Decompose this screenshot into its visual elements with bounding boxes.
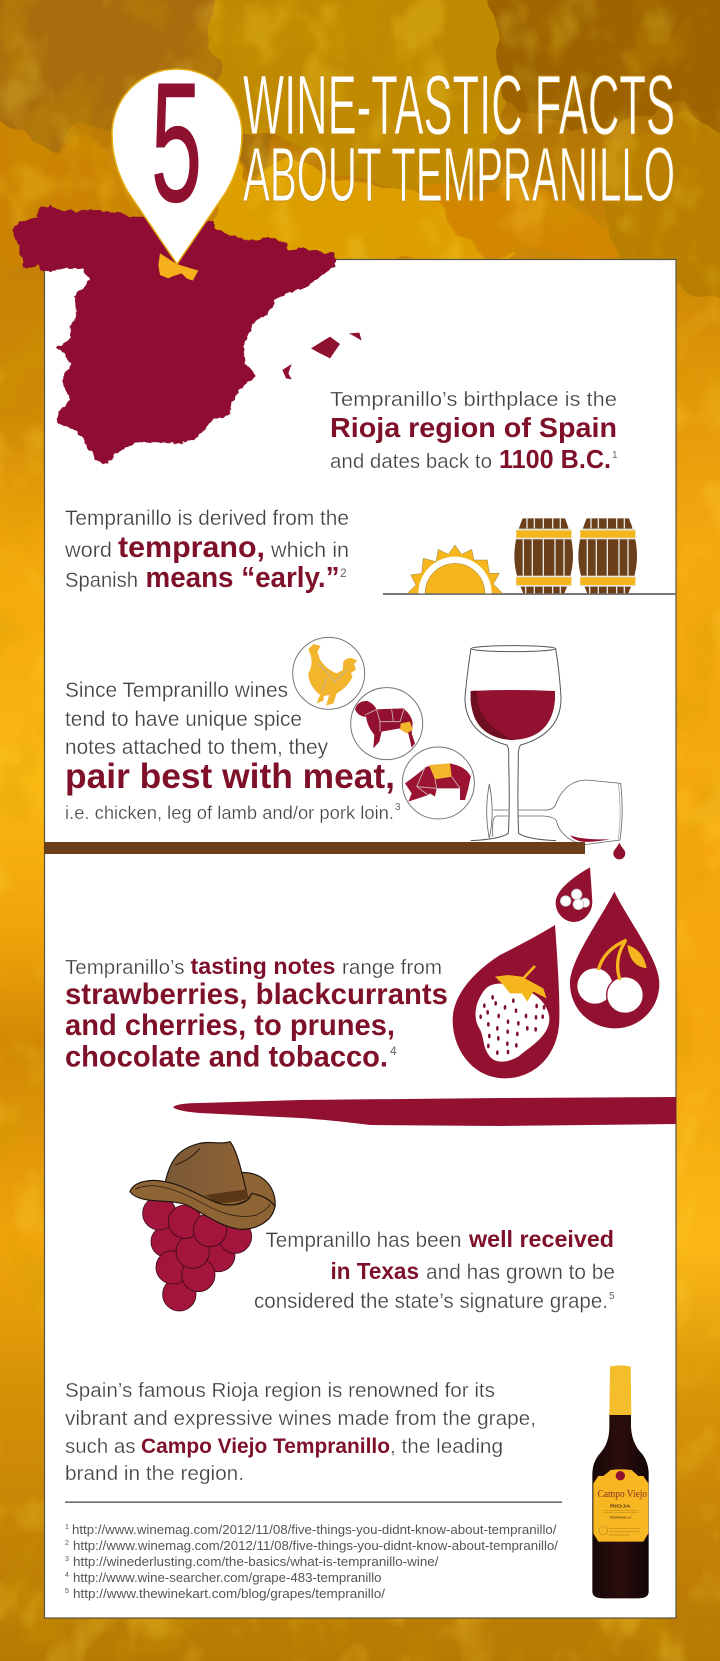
icon: chicken in circle xyxy=(293,637,365,709)
fact 2: temprano: word xyxy=(64,539,112,562)
fact 1: birthplace xyxy=(330,388,618,474)
fact 2: temprano: which in xyxy=(270,539,349,562)
fact 4: tasting notes text: 4 xyxy=(390,1044,397,1058)
footnotes: http://www.winemag.com/2012/11/08/five-things-you-didnt-know-about-tempranillo/ xyxy=(72,1523,557,1537)
fact 4: tasting notes text: chocolate and tobacco. xyxy=(65,1040,388,1074)
panel: white content card xyxy=(44,260,676,1618)
icon: cherry drop xyxy=(570,892,659,1028)
fact 5: Texas text: 5 xyxy=(609,1291,615,1302)
icon: blackcurrant drop xyxy=(556,867,592,922)
fact 1: birthplace: 1 xyxy=(612,450,618,461)
fact 3: pairing text: i.e. chicken, leg of lamb and/or pork loin. xyxy=(65,803,394,823)
fact 4: tasting notes text: strawberries, blackcurrants xyxy=(65,978,448,1011)
fact 3: pairing text: notes attached to them, they xyxy=(65,736,328,759)
icon: barrel 1 xyxy=(514,518,573,593)
icon: barrel 2 xyxy=(578,518,637,593)
fact 5: Texas text: considered the state’s signature grape. xyxy=(254,1290,608,1313)
fact 4: tasting notes text: range from xyxy=(342,956,442,979)
footnotes: 3 xyxy=(65,1556,69,1563)
fact 4: tasting notes text: Tempranillo’s xyxy=(65,956,184,979)
icon: pig in circle xyxy=(402,747,474,819)
footnotes: http://winederlusting.com/the-basics/what-is-tempranillo-wine/ xyxy=(73,1555,439,1569)
icon: lamb in circle xyxy=(351,688,423,760)
fact 6: Campo Viejo text: brand in the region. xyxy=(65,1462,244,1485)
fact 3: pairing text: pair best with meat, xyxy=(65,757,395,796)
fact 2: temprano: Tempranillo is derived from the xyxy=(65,507,349,530)
fact 6: Campo Viejo text: Spain’s famous Rioja region is renowned for its xyxy=(65,1379,495,1402)
fact 6: Campo Viejo text: vibrant and expressive wines made from the grape, xyxy=(65,1407,536,1430)
footnotes: 2 xyxy=(65,1540,69,1547)
fact 5: Texas text: Tempranillo has been xyxy=(266,1229,462,1252)
shelf bar xyxy=(44,842,585,854)
fact 2: temprano: means “early.” xyxy=(146,562,340,594)
fact 3: pairing text: tend to have unique spice xyxy=(65,708,302,731)
fact 3: pairing text: Since Tempranillo wines xyxy=(65,679,288,702)
fact 1: birthplace: and dates back to xyxy=(330,450,492,473)
fact 2: temprano: temprano, xyxy=(118,531,265,564)
icon: Campo Viejo bottle xyxy=(592,1365,649,1598)
icon: rising sun xyxy=(407,545,503,593)
icon: strawberry drop xyxy=(453,925,559,1078)
fact 1: birthplace: Tempranillo’s birthplace is the xyxy=(330,388,617,411)
fact 6: Campo Viejo text: , the leading xyxy=(390,1435,503,1458)
map pin with number 5: 5 xyxy=(151,48,202,238)
map of Spain with Rioja highlighted xyxy=(12,205,362,464)
fact 5: Texas text xyxy=(254,1226,615,1313)
icon: standing wine glass xyxy=(465,646,561,841)
fact 1: birthplace: Rioja region of Spain xyxy=(330,412,617,443)
footnotes: 1 xyxy=(65,1524,69,1531)
fact 5: Texas text: and has grown to be xyxy=(426,1261,615,1284)
footnotes: 5 xyxy=(65,1588,69,1595)
wine smear divider xyxy=(173,1097,676,1126)
ground line under sun and barrels xyxy=(383,593,676,595)
fact 6: Campo Viejo text: Campo Viejo Tempranillo xyxy=(141,1434,390,1458)
footnote rule xyxy=(65,1502,562,1503)
fact 2: temprano: Spanish xyxy=(65,569,138,592)
footnotes xyxy=(65,1523,559,1601)
fact 3: pairing text xyxy=(65,679,401,823)
title xyxy=(243,58,675,218)
icon: Campo Viejo bottle: TEMPRANILLO xyxy=(609,1516,632,1520)
fact 5: Texas text: in Texas xyxy=(330,1258,419,1284)
footnotes: http://www.winemag.com/2012/11/08/five-things-you-didnt-know-about-tempranillo/ xyxy=(73,1539,559,1553)
fact 3: pairing text: 3 xyxy=(395,802,401,813)
fact 6: Campo Viejo text xyxy=(65,1379,536,1485)
fact 2: temprano xyxy=(64,507,349,594)
fact 4: tasting notes text: tasting notes xyxy=(190,953,336,979)
fact 2: temprano: 2 xyxy=(340,566,347,580)
fact 4: tasting notes text: and cherries, to prunes, xyxy=(65,1009,395,1042)
fact 1: birthplace: 1100 B.C. xyxy=(499,446,611,474)
footnotes: 4 xyxy=(65,1572,69,1579)
icon: Campo Viejo bottle: Campo Viejo xyxy=(598,1489,647,1500)
fact 6: Campo Viejo text: such as xyxy=(65,1435,136,1458)
icon: grape bunch with cowboy hat xyxy=(130,1142,275,1311)
footnotes: http://www.wine-searcher.com/grape-483-tempranillo xyxy=(73,1571,382,1585)
icon: tipped wine glass with drip xyxy=(487,780,625,859)
fact 4: tasting notes text xyxy=(65,953,448,1074)
icon: Campo Viejo bottle: RIOJA xyxy=(610,1503,631,1509)
map pin with number 5 xyxy=(112,48,242,264)
fact 5: Texas text: well received xyxy=(468,1226,614,1252)
footnotes: http://www.thewinekart.com/blog/grapes/tempranillo/ xyxy=(73,1587,386,1601)
